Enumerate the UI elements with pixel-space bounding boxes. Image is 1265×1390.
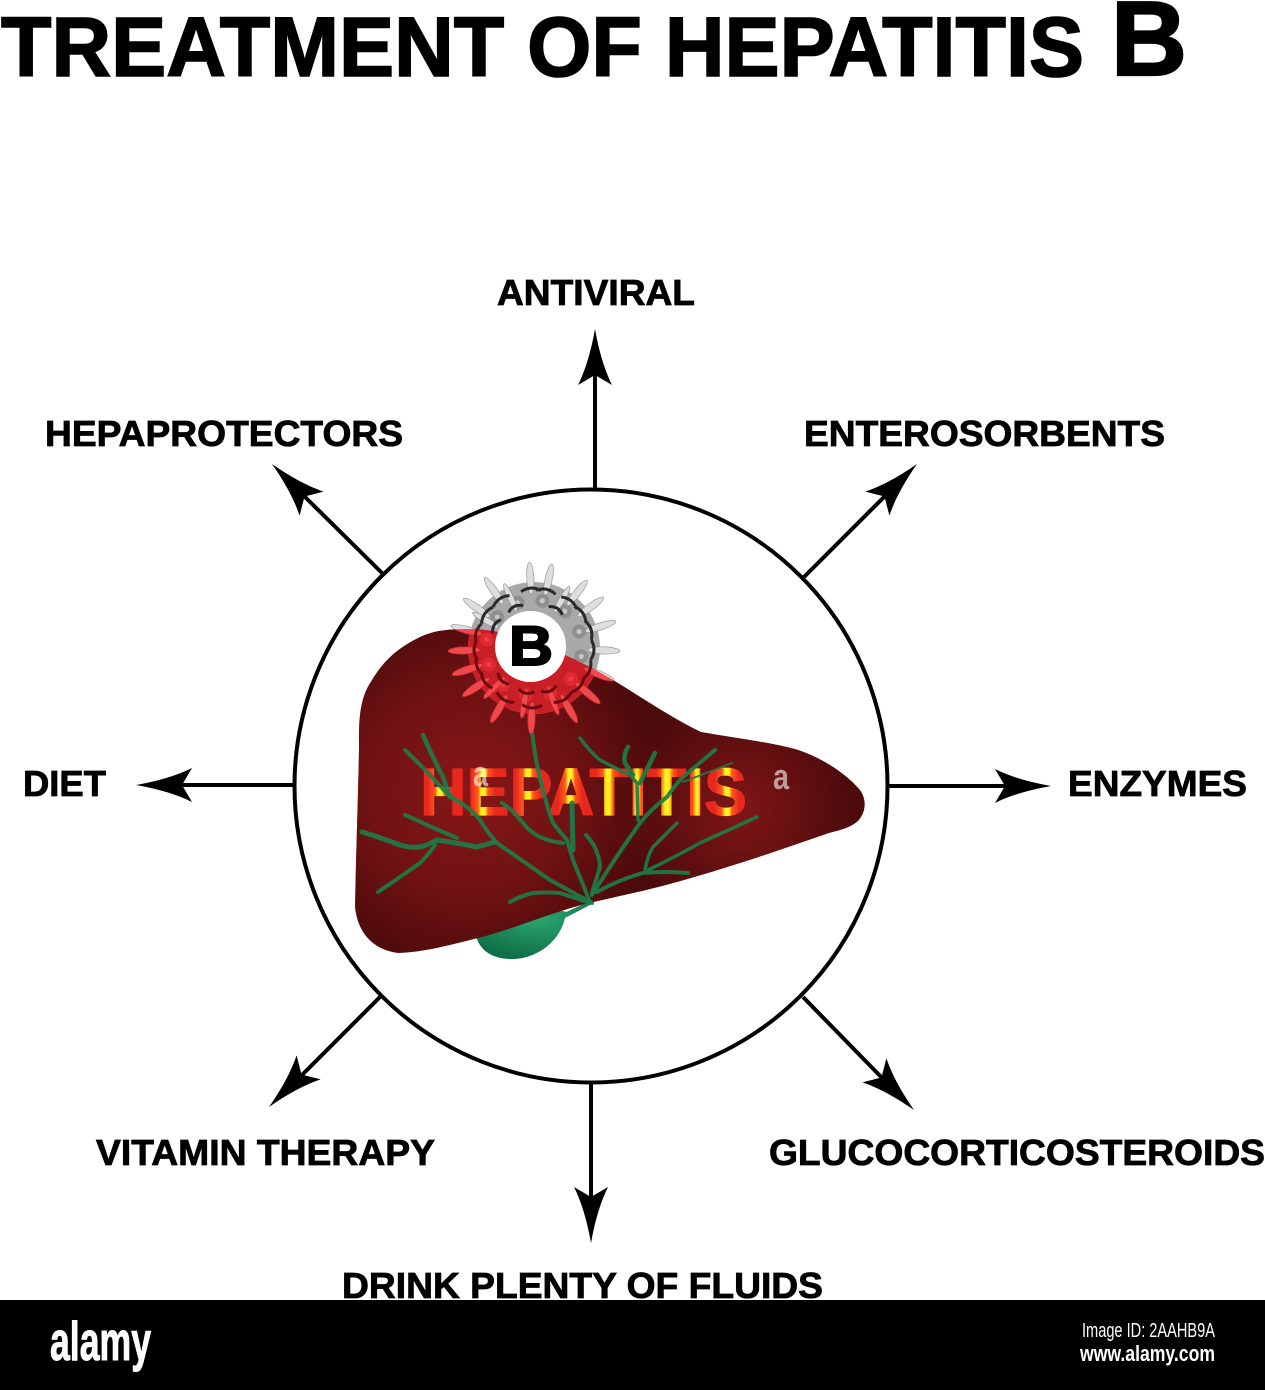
arrow: to diet — [136, 768, 294, 802]
watermark letters: a — [773, 756, 790, 797]
label: glucocorticosteroids: GLUCOCORTICOSTEROIDS — [769, 1132, 1265, 1173]
footer bar — [0, 1300, 1265, 1390]
arrow: to enzymes — [889, 769, 1051, 803]
arrow: to drink plenty of fluids — [574, 1083, 608, 1243]
gallbladder — [476, 902, 590, 959]
hepatitis B virus — [448, 562, 620, 734]
central circle — [294, 490, 888, 1082]
label: diet: DIET — [23, 763, 106, 804]
title: TREATMENT OF HEPATITIS — [1, 0, 1084, 94]
watermark letters: a — [473, 753, 489, 794]
footer logo: alamy — [50, 1310, 151, 1372]
label: enzymes: ENZYMES — [1068, 763, 1247, 804]
footer image id: Image ID: 2AAHB9A — [1082, 1320, 1215, 1342]
arrow: up to antiviral — [578, 329, 612, 488]
arrow: to enterosorbents — [804, 452, 929, 577]
arrow: to hepaprotectors — [260, 452, 382, 573]
liver — [355, 629, 865, 953]
watermark letters — [473, 753, 790, 797]
bile duct branches — [362, 732, 757, 903]
arrow: to glucocorticosteroids — [803, 997, 926, 1122]
label: drink plenty of fluids: DRINK PLENTY OF FLUIDS — [342, 1265, 823, 1306]
label: vitamin therapy: VITAMIN THERAPY — [96, 1132, 435, 1173]
label: enterosorbents: ENTEROSORBENTS — [804, 413, 1165, 454]
label: antiviral: ANTIVIRAL — [497, 272, 695, 313]
badge: B: B — [509, 614, 553, 677]
virus grey part — [448, 562, 620, 734]
liver illustration — [355, 629, 865, 960]
footer url: www.alamy.com — [1079, 1341, 1215, 1366]
arrow: to vitamin therapy — [257, 997, 380, 1119]
virus red part over liver — [448, 629, 614, 734]
label: hepaprotectors: HEPAPROTECTORS — [45, 413, 403, 454]
badge: B — [495, 611, 566, 682]
word: hepatitis: HEPATITIS — [420, 755, 747, 830]
